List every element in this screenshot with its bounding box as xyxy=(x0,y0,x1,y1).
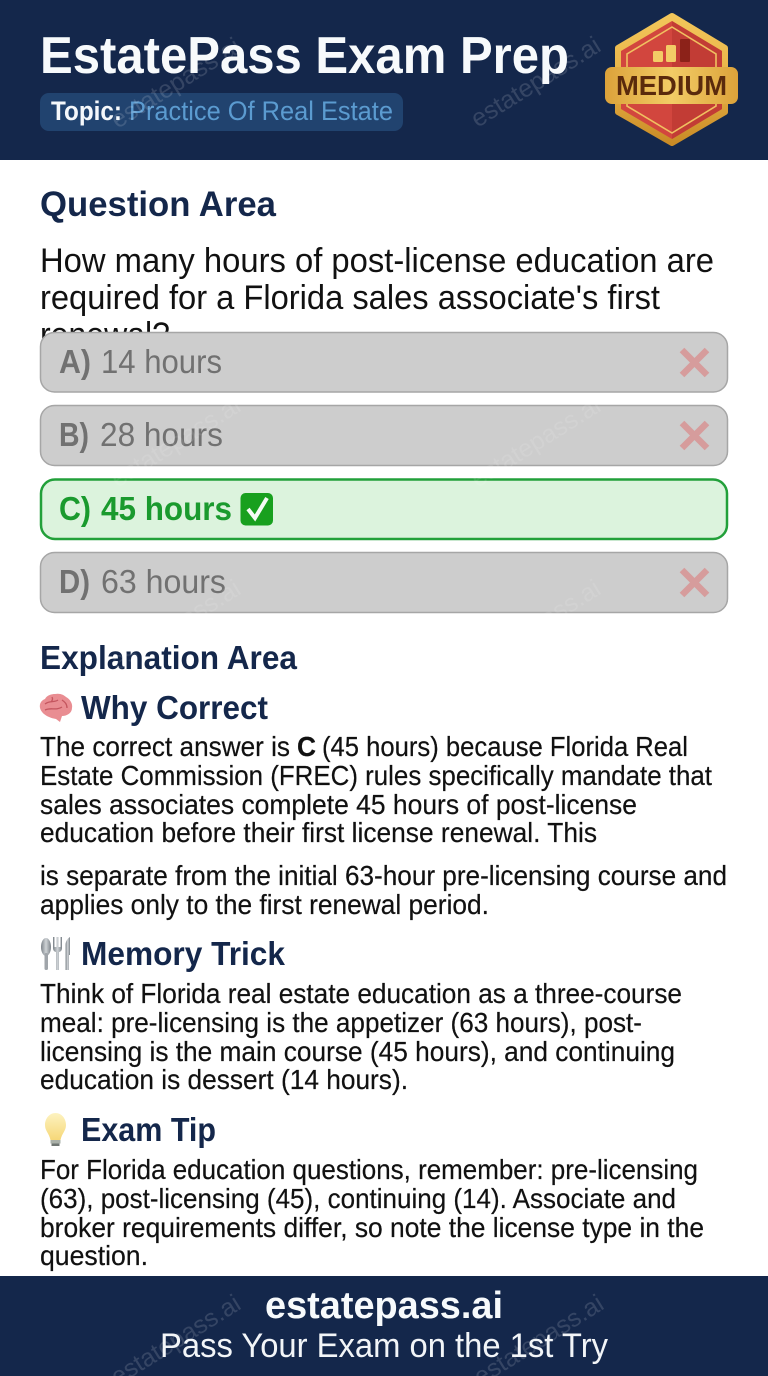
text: why correct paragraph: is separate from the initial 63-hour pre-licensing course and xyxy=(40,860,727,891)
footer brand: estatepass.ai xyxy=(265,1285,503,1327)
option A: 14 hours xyxy=(101,343,222,380)
option B: 28 hours xyxy=(100,416,223,453)
watermarks: estatepass.ai xyxy=(466,574,606,676)
text: exam tip paragraph: broker requirements differ, so note the license type in the xyxy=(40,1212,704,1243)
section: exam tip xyxy=(40,1111,704,1271)
section: why correct xyxy=(40,689,727,920)
question text xyxy=(40,242,714,354)
watermarks: estatepass.ai xyxy=(106,391,246,493)
watermarks: estatepass.ai xyxy=(106,574,246,676)
icon: medium difficulty badge: MEDIUM xyxy=(616,70,727,101)
option D: 63 hours xyxy=(101,563,226,600)
text: exam tip paragraph: question. xyxy=(40,1240,148,1271)
question text: renewal? xyxy=(40,316,170,354)
section: memory trick xyxy=(40,935,682,1095)
heading: exam tip: Exam Tip xyxy=(81,1111,216,1148)
text: exam tip paragraph xyxy=(40,1154,704,1271)
option D xyxy=(40,552,728,612)
option D: D) xyxy=(59,563,90,600)
watermarks: estatepass.ai xyxy=(106,32,246,134)
heading: explanation area: Explanation Area xyxy=(40,639,298,676)
text: memory trick paragraph: Think of Florida real estate education as a three-course xyxy=(40,978,682,1009)
heading: question area: Question Area xyxy=(40,185,277,224)
text: why correct paragraph: education before their first license renewal. This xyxy=(40,817,597,848)
text: memory trick paragraph: licensing is the main course (45 hours), and continuing xyxy=(40,1036,675,1067)
topic pill: Practice Of Real Estate xyxy=(129,96,393,126)
option B xyxy=(40,406,728,466)
text: why correct paragraph: sales associates complete 45 hours of post-license xyxy=(40,789,637,820)
panel: footer xyxy=(0,1276,768,1376)
text: memory trick paragraph: meal: pre-licensing is the appetizer (63 hours), post- xyxy=(40,1007,642,1038)
watermarks xyxy=(106,31,609,1376)
icon: fork and knife xyxy=(41,937,70,970)
option C correct xyxy=(41,480,727,539)
icon: cross A xyxy=(682,350,707,375)
icon: cross B xyxy=(682,423,707,448)
text: memory trick paragraph xyxy=(40,978,682,1095)
text: why correct paragraph: The correct answer is xyxy=(40,731,290,762)
title: EstatePass Exam Prep xyxy=(40,27,569,85)
heading: memory trick: Memory Trick xyxy=(81,935,286,972)
text: exam tip paragraph: For Florida education questions, remember: pre-licensing xyxy=(40,1154,698,1185)
option A: A) xyxy=(59,343,91,380)
footer tagline: Pass Your Exam on the 1st Try xyxy=(160,1327,608,1365)
watermarks: estatepass.ai xyxy=(466,391,606,493)
icon: check mark xyxy=(240,493,273,526)
watermarks: estatepass.ai xyxy=(466,31,606,133)
option A xyxy=(40,332,728,392)
topic pill xyxy=(40,93,403,131)
icon: light bulb xyxy=(45,1113,66,1146)
option B: B) xyxy=(59,416,89,453)
option C correct: 45 hours xyxy=(101,490,232,527)
text: why correct paragraph: Estate Commission (FREC) rules specifically mandate that xyxy=(40,760,712,791)
text: why correct paragraph xyxy=(40,731,727,920)
topic pill: Topic: xyxy=(51,96,122,126)
text: memory trick paragraph: education is dessert (14 hours). xyxy=(40,1064,408,1095)
text: why correct paragraph: (45 hours) because Florida Real xyxy=(322,731,688,762)
question text: required for a Florida sales associate's first xyxy=(40,279,661,317)
option C correct: C) xyxy=(59,490,91,527)
text: why correct paragraph: C xyxy=(297,731,316,762)
icon: cross D xyxy=(682,570,707,595)
text: exam tip paragraph: (63), post-licensing (45), continuing (14). Associate and xyxy=(40,1183,676,1214)
panel: header xyxy=(0,0,768,160)
question text: How many hours of post-license education are xyxy=(40,242,714,280)
icon: medium difficulty badge xyxy=(605,16,738,143)
text: why correct paragraph: applies only to the first renewal period. xyxy=(40,889,489,920)
heading: why correct: Why Correct xyxy=(81,689,268,726)
icon: brain xyxy=(40,694,72,722)
